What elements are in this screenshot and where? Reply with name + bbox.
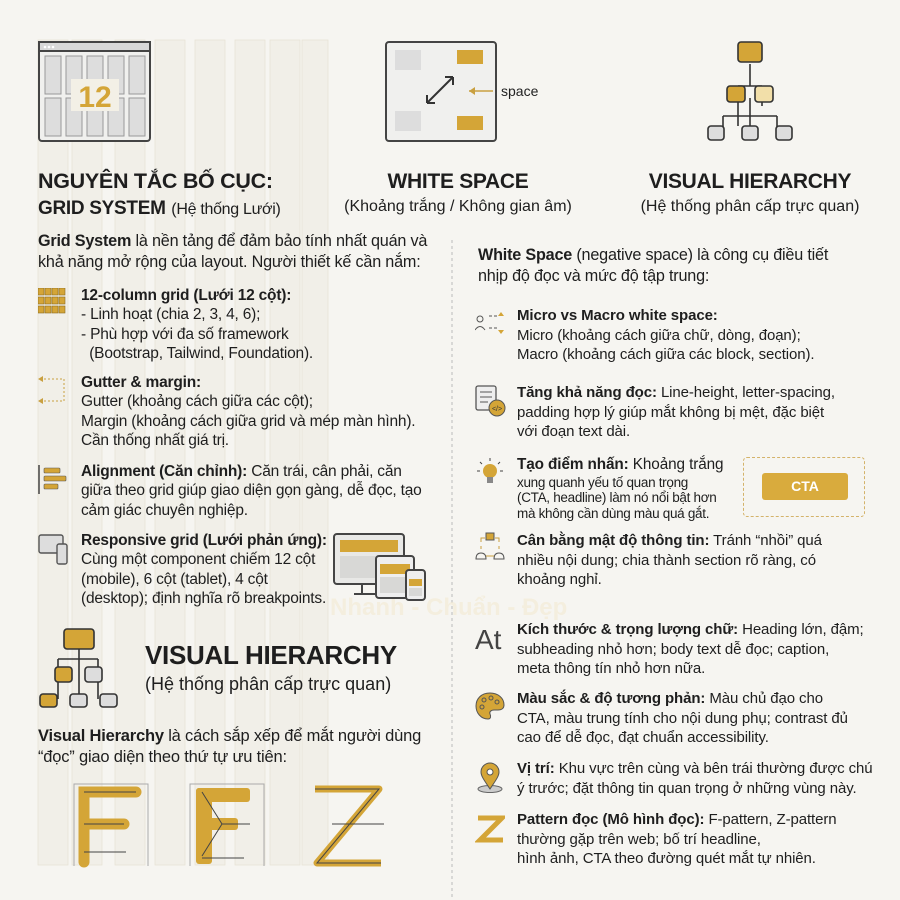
item: responsive grid: Responsive grid (Lưới phản ứng): (81, 532, 327, 549)
item: micro vs macro: Micro vs Macro white space: (517, 307, 718, 324)
item: emphasis: Tạo điểm nhấn: Khoảng trắng (517, 456, 723, 473)
icon: hierarchy lower (39, 628, 118, 708)
text: white space intro (478, 246, 828, 285)
icon: gutter (38, 376, 64, 404)
item: color contrast: cao để dễ đọc, đạt chuẩn accessibility. (517, 729, 769, 746)
item: font size weight: subheading nhỏ hơn; body text dễ đọc; caption, (517, 640, 829, 658)
title: grid system (38, 168, 280, 219)
CTA callout (743, 457, 865, 517)
item: position: Vị trí: Khu vực trên cùng và bên trái thường được chú (517, 760, 873, 777)
item: responsive grid (81, 532, 327, 607)
icon: location pin (478, 762, 502, 793)
title: visual hierarchy top (641, 170, 859, 215)
item: micro vs macro: Micro (khoảng cách giữa chữ, dòng, đoạn); (517, 326, 801, 344)
item: gutter & margin: Gutter (khoảng cách giữa các cột); (81, 393, 313, 410)
title: white space: WHITE SPACE (388, 170, 528, 193)
item: color contrast: CTA, màu trung tính cho nội dung phụ; contrast đủ (517, 710, 848, 726)
item: gutter & margin: Margin (khoảng cách giữa grid và mép màn hình). (81, 413, 415, 430)
item: reading pattern: thường gặp trên web; bố trí headline, (517, 830, 761, 848)
patterns: F F Z (74, 784, 384, 868)
text: grid intro (38, 232, 428, 271)
icon: readability: </> (492, 406, 502, 413)
icon: white space box: space (501, 83, 539, 99)
icon: At: At (475, 624, 501, 655)
item: readability: Tăng khả năng đọc: Line-height, letter-spacing, (517, 384, 835, 401)
item: micro vs macro: Macro (khoảng cách giữa các block, section). (517, 346, 814, 363)
item: reading pattern: hình ảnh, CTA theo đường quét mắt tự nhiên. (517, 850, 816, 867)
text: visual hierarchy intro: Visual Hierarchy là cách sắp xếp để mắt người dùng (38, 727, 421, 745)
item: balance density: nhiều nội dung; chia thành section rõ ràng, có (517, 552, 816, 568)
item: alignment (81, 463, 422, 519)
CTA callout: CTA (791, 478, 819, 494)
icon: 12 grid window: 12 (78, 81, 112, 114)
item: font size weight: Kích thước & trọng lượng chữ: Heading lớn, đậm; (517, 621, 864, 638)
text: grid intro: khả năng mở rộng của layout. Người thiết kế cần nắm: (38, 253, 420, 271)
title: white space: (Khoảng trắng / Không gian âm) (344, 198, 572, 215)
text: white space intro: White Space (negative space) là công cụ điều tiết (478, 246, 828, 264)
icon: responsive (38, 534, 68, 565)
title: grid system: GRID SYSTEM (Hệ thống Lưới) (38, 198, 280, 219)
text: grid intro: Grid System là nền tảng để đảm bảo tính nhất quán và (38, 232, 427, 250)
item: emphasis: mà không cần dùng màu quá gắt. (517, 506, 709, 520)
title: visual hierarchy lower: VISUAL HIERARCHY (145, 640, 397, 670)
item: micro vs macro (517, 307, 814, 363)
item: responsive grid: Cùng một component chiếm 12 cột (81, 551, 315, 568)
icon: palette (476, 692, 504, 720)
icon: bulb (477, 458, 503, 483)
item: responsive grid: (mobile), 6 cột (tablet), 4 cột (81, 571, 268, 588)
item: alignment: cảm giác chuyên nghiệp. (81, 502, 248, 519)
item: readability (517, 384, 835, 440)
icon: 12 column (38, 288, 66, 314)
item: readability: với đoạn text dài. (517, 423, 630, 440)
title: white space (344, 170, 572, 215)
item: position (517, 760, 873, 796)
item: responsive grid: (desktop); định nghĩa rõ breakpoints. (81, 590, 326, 607)
item: 12-column grid: 12-column grid (Lưới 12 cột): (81, 287, 291, 304)
icon: devices (333, 533, 426, 601)
item: 12-column grid: (Bootstrap, Tailwind, Foundation). (89, 345, 313, 362)
icon: alignment (38, 465, 66, 494)
item: 12-column grid: - Linh hoạt (chia 2, 3, 4, 6); (81, 306, 260, 323)
item: readability: padding hợp lý giúp mắt không bị mệt, đặc biệt (517, 404, 824, 420)
title: visual hierarchy lower (145, 640, 397, 694)
item: gutter & margin: Cần thống nhất giá trị. (81, 432, 229, 449)
item: font size weight: meta thông tín nhỏ hơn nữa. (517, 660, 705, 677)
icon: readability (475, 385, 506, 416)
item: balance density: khoảng nghỉ. (517, 571, 602, 588)
item: 12-column grid (81, 287, 313, 362)
text: white space intro: nhịp độ đọc và mức độ tập trung: (478, 267, 709, 285)
icon: Z (475, 816, 505, 842)
text: visual hierarchy intro: “đọc” giao diện theo thứ tự ưu tiên: (38, 748, 287, 766)
text: visual hierarchy intro (38, 726, 421, 766)
item: emphasis: (CTA, headline) làm nó nổi bật hơn (517, 490, 717, 505)
title: grid system: NGUYÊN TẮC BỐ CỤC: (38, 169, 273, 193)
icon: 12 grid window (38, 41, 151, 142)
item: alignment: Alignment (Căn chỉnh): Căn trái, cân phải, căn (81, 463, 402, 480)
item: alignment: giữa theo grid giúp giao diện gọn gàng, dễ đọc, tạo (81, 482, 422, 499)
item: emphasis (517, 455, 723, 521)
item: 12-column grid: - Phù hợp với đa số framework (81, 326, 288, 343)
item: reading pattern: Pattern đọc (Mô hình đọc): F-pattern, Z-pattern (517, 811, 837, 828)
icon: white space box (385, 41, 539, 142)
item: gutter & margin: Gutter & margin: (81, 374, 201, 391)
icon: micro macro (475, 312, 504, 334)
item: emphasis: xung quanh yếu tố quan trọng (517, 474, 688, 490)
item: position: ý trước; đặt thông tin quan trọng ở những vùng này. (517, 780, 857, 796)
item: color contrast: Màu sắc & độ tương phản: Màu chủ đạo cho (517, 690, 823, 707)
item: balance density (517, 532, 822, 588)
icon: hierarchy top (707, 41, 793, 141)
item: reading pattern (517, 811, 837, 867)
title: visual hierarchy lower: (Hệ thống phân cấp trực quan) (145, 674, 391, 694)
title: visual hierarchy top: VISUAL HIERARCHY (649, 170, 851, 193)
icon: balance (476, 532, 504, 560)
item: gutter & margin (81, 374, 415, 449)
watermark: Nhanh - Chuẩn - Đẹp (330, 594, 567, 621)
item: balance density: Cân bằng mật độ thông tin: Tránh “nhồi” quá (517, 532, 822, 549)
item: color contrast (517, 690, 848, 746)
title: visual hierarchy top: (Hệ thống phân cấp trực quan) (641, 198, 859, 215)
item: font size weight (517, 621, 864, 677)
